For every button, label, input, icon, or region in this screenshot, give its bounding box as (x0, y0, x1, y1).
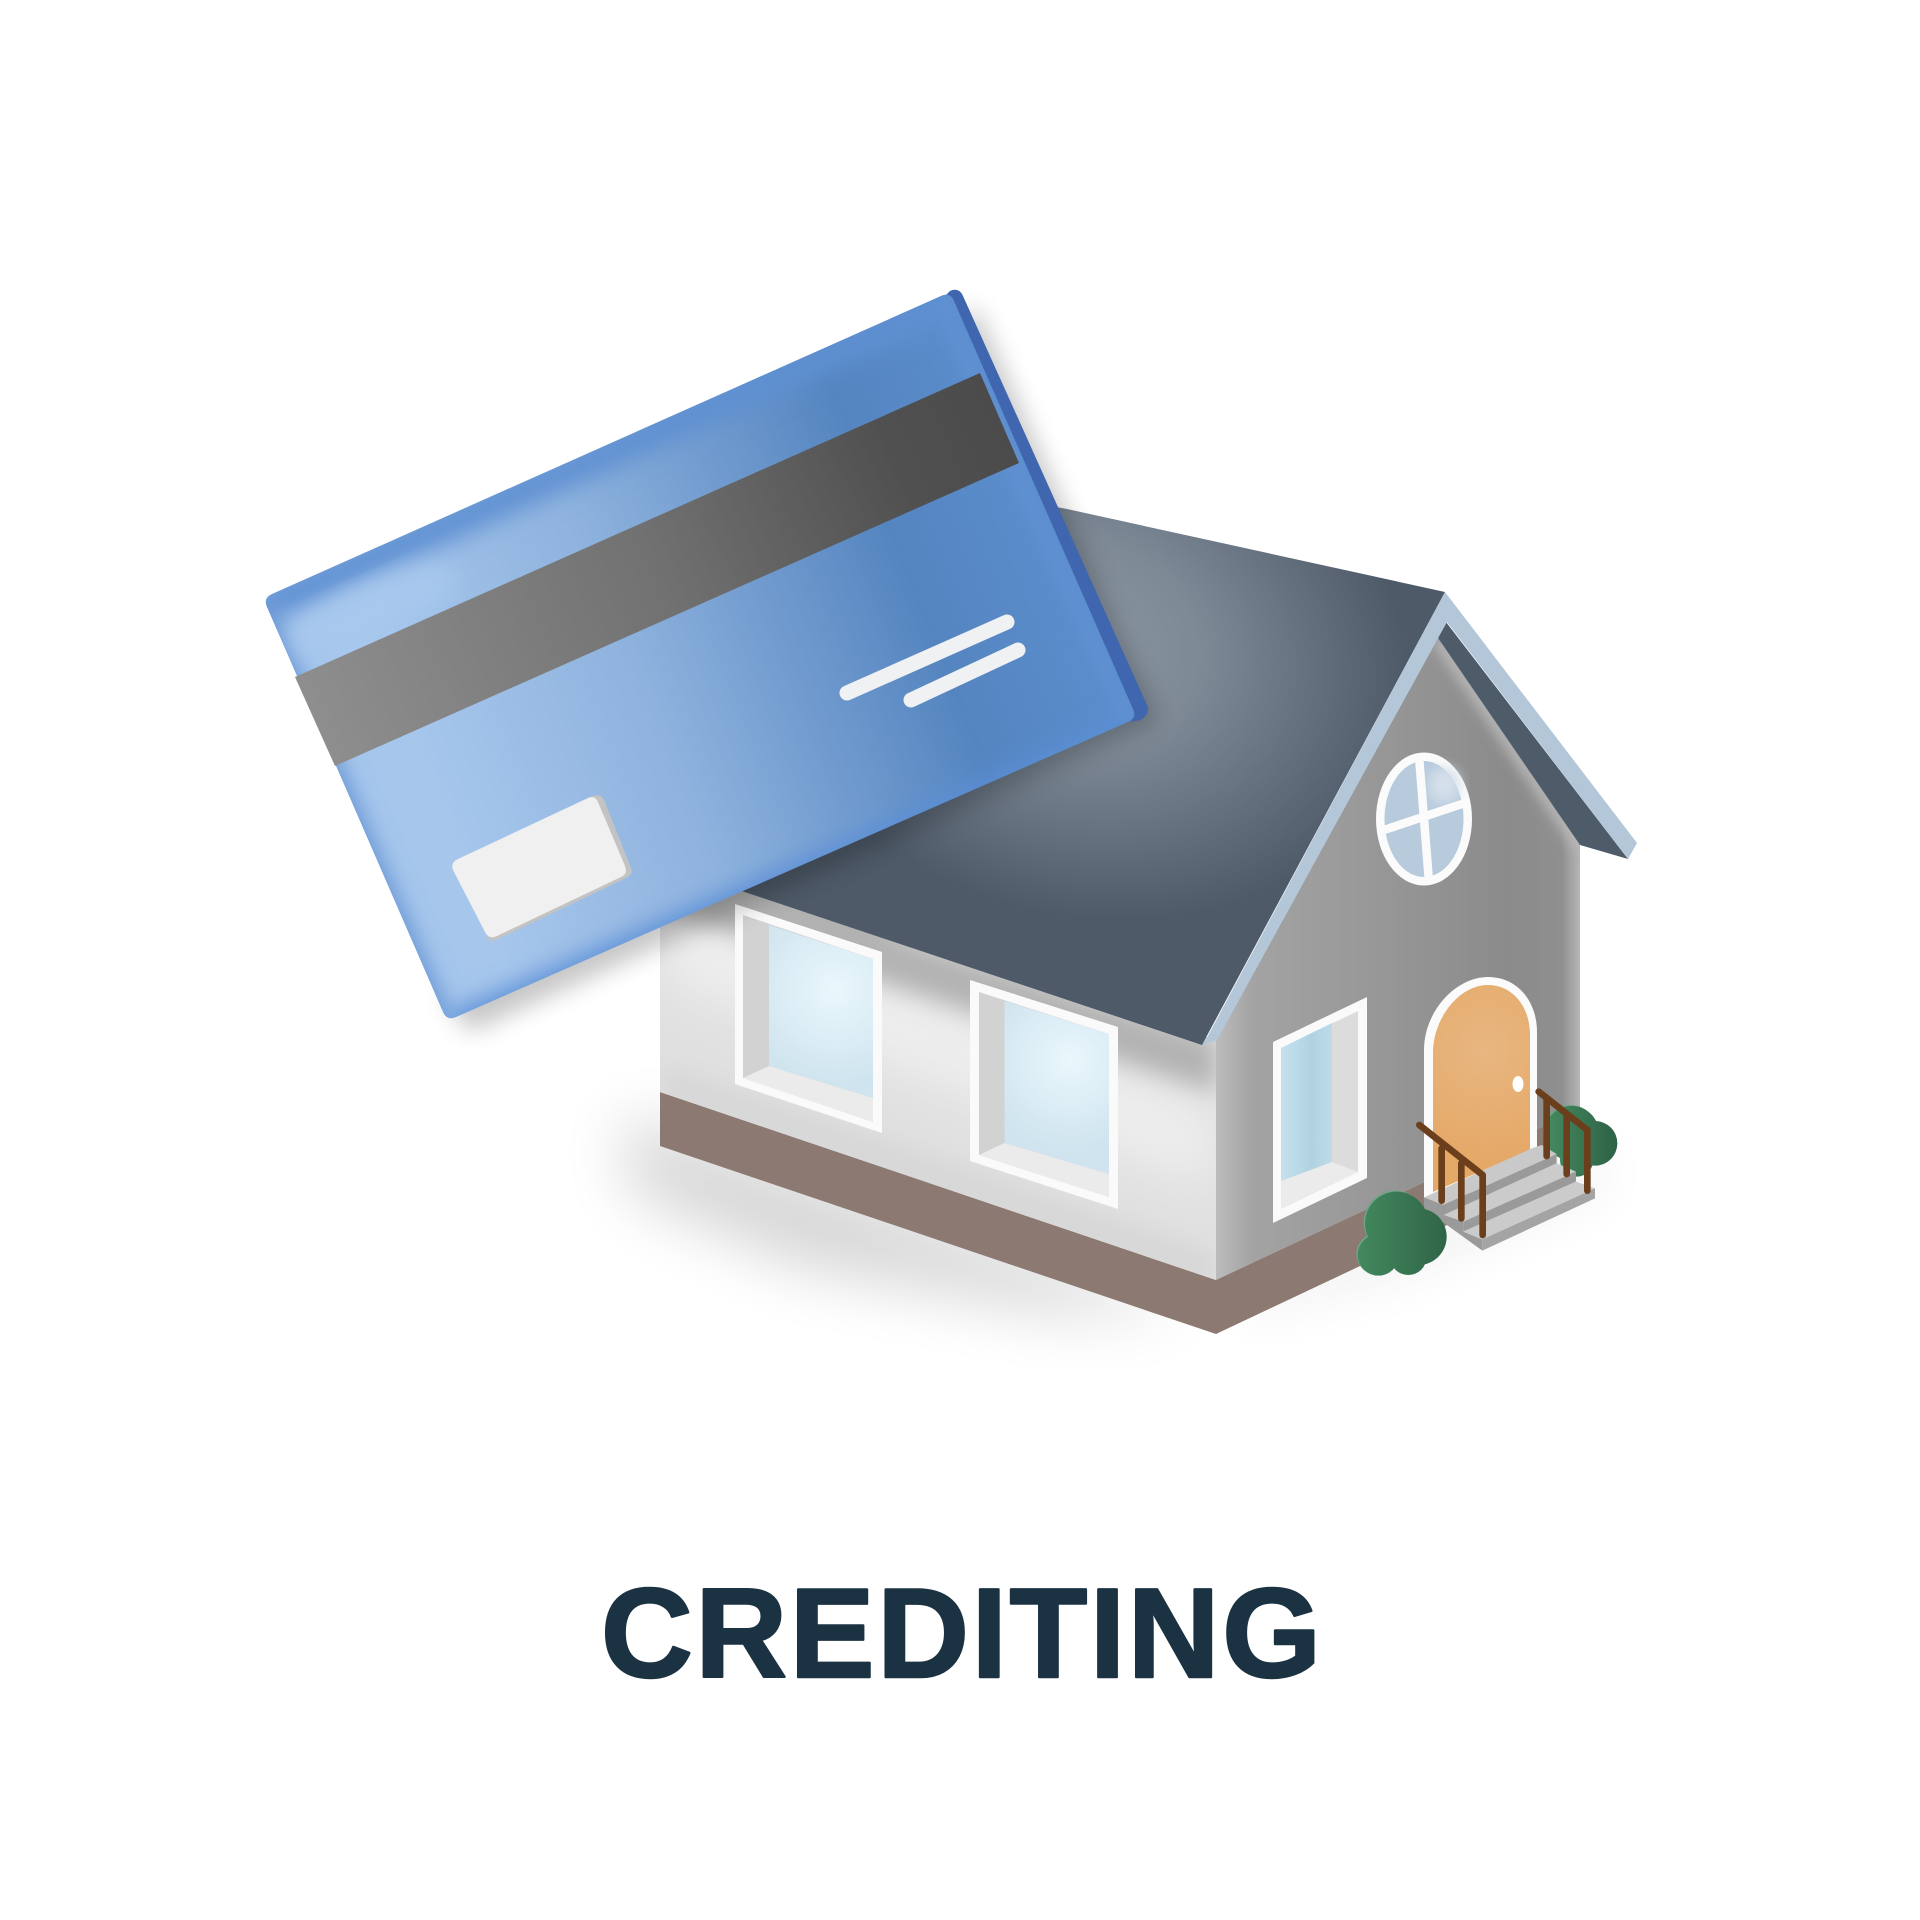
gable window (1273, 997, 1367, 1223)
credit card (235, 282, 1158, 1045)
chip (452, 795, 632, 941)
front wall (660, 891, 1216, 1280)
card face (235, 282, 1150, 1045)
magnetic stripe (295, 373, 1019, 766)
roof soffit (1438, 622, 1628, 859)
right bush (1543, 1105, 1617, 1177)
steps (1424, 1145, 1595, 1251)
window 1 (735, 904, 882, 1133)
foundation (660, 1092, 1580, 1334)
illustration canvas (266, 290, 1637, 1680)
left bush (1356, 1191, 1447, 1276)
round attic window (1376, 752, 1472, 886)
house (640, 460, 1637, 1334)
ground shadow (625, 1115, 1610, 1320)
left railing (1419, 1125, 1483, 1235)
door (1424, 977, 1537, 1198)
signature lines (847, 622, 1018, 700)
window 2 (970, 980, 1118, 1209)
card shadow (445, 305, 1158, 1032)
roof (640, 460, 1445, 1045)
roof trim (1203, 592, 1637, 1045)
right railing (1539, 1092, 1587, 1191)
gable wall (1216, 638, 1580, 1280)
title: CREDITING (601, 1562, 1321, 1704)
steps, railings and bushes (1356, 1092, 1617, 1276)
card edge (945, 290, 1148, 722)
